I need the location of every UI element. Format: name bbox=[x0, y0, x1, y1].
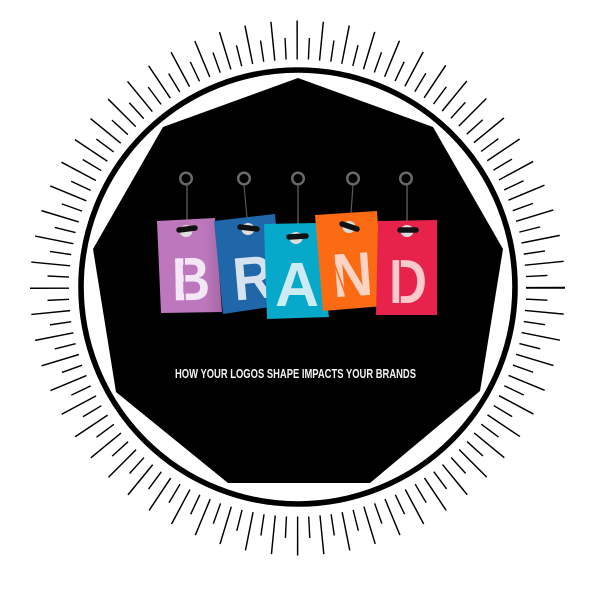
tag D: D bbox=[389, 248, 427, 317]
tag R: R bbox=[230, 242, 276, 314]
tag A bbox=[264, 173, 329, 320]
black nonagon bbox=[93, 78, 503, 483]
tag N: N bbox=[330, 240, 375, 311]
tag R bbox=[214, 173, 283, 314]
tag A: A bbox=[275, 251, 319, 320]
tag B: B bbox=[171, 245, 211, 313]
outer ring bbox=[81, 70, 515, 504]
tag D bbox=[376, 173, 437, 317]
tag N bbox=[315, 173, 384, 311]
subtitle: HOW YOUR LOGOS SHAPE IMPACTS YOUR BRANDS bbox=[175, 366, 416, 381]
brand tags bbox=[157, 173, 437, 320]
tag B bbox=[157, 173, 222, 313]
radial tick marks bbox=[50, 40, 546, 536]
